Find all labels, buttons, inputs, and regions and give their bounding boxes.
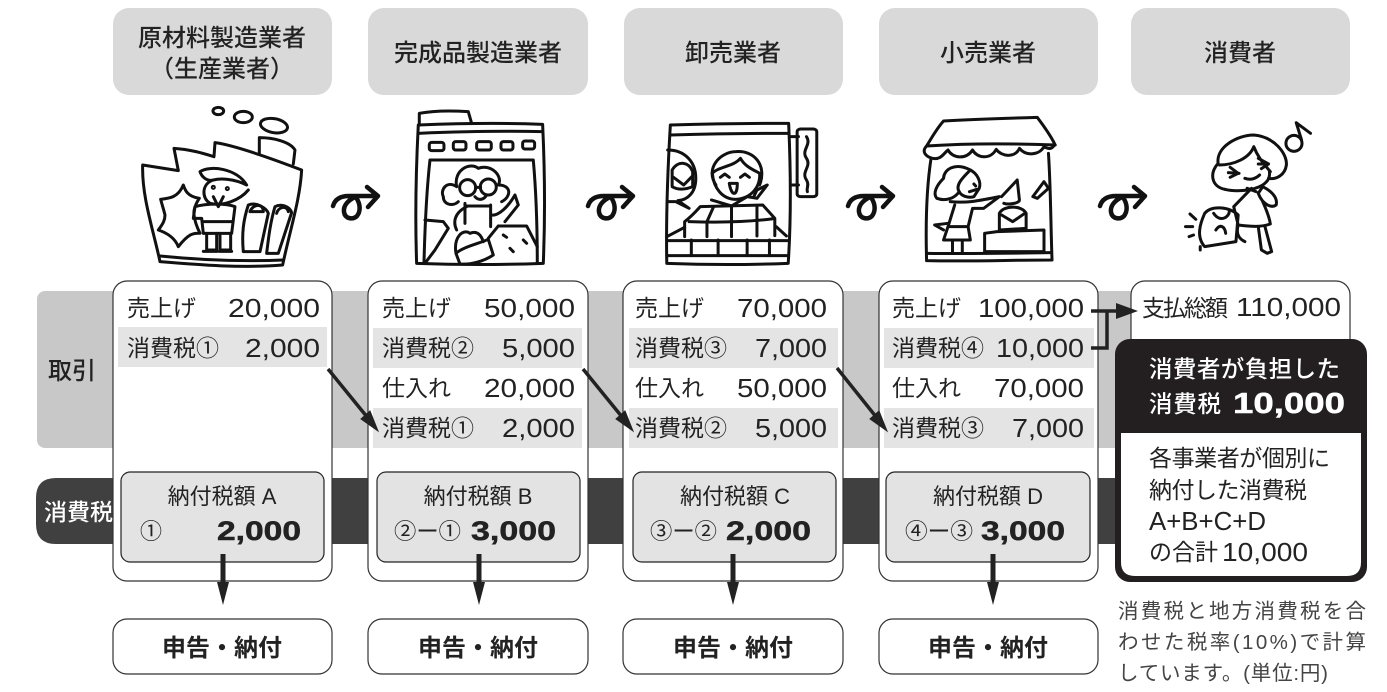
panel: finished goods manufacturer: 消費税① [382, 409, 474, 443]
panel: retailer: 70,000 [994, 373, 1084, 403]
heading: consumer: 消費者 [1204, 40, 1276, 67]
panel: wholesaler: ③ー② [650, 514, 717, 546]
band: transactions background [37, 291, 1137, 448]
panel: finished goods manufacturer: 仕入れ [382, 369, 451, 403]
panel: finished goods manufacturer: ②ー① [394, 514, 461, 546]
panel: raw material manufacturer: 消費税① [127, 329, 219, 363]
panel: raw material manufacturer: 20,000 [228, 293, 320, 323]
panel: consumer tax burden: A+B+C+D [1149, 506, 1266, 536]
panel: raw material manufacturer: 2,000 [217, 516, 301, 546]
footnote: わせた税率(10%)で計算 [1118, 631, 1366, 654]
heading: wholesaler [624, 8, 843, 95]
box: filing and payment C: 申告・納付 [673, 635, 793, 662]
footnote: しています。(単位:円) [1118, 662, 1328, 685]
panel: retailer: 7,000 [1012, 413, 1084, 443]
panel: consumer payment: 支払総額 [1142, 295, 1228, 321]
icon: happy consumer [1186, 123, 1310, 253]
box: filing and payment D: 申告・納付 [928, 635, 1048, 662]
arrow: flow 1 [333, 187, 378, 218]
panel: raw material manufacturer: 納付税額 A [168, 484, 277, 509]
panel: consumer tax burden: 消費者が負担した [1149, 356, 1340, 382]
box: filing and payment B [368, 619, 588, 674]
arrow: filing B [473, 554, 485, 605]
icon: finished goods workshop [416, 111, 544, 265]
heading: finished goods manufacturer: 完成品製造業者 [394, 40, 562, 67]
arrow: tax carried to wholesaler [583, 369, 633, 431]
panel: finished goods manufacturer: 5,000 [502, 333, 575, 363]
box: filing and payment D [879, 619, 1098, 674]
arrow: flow 2 [588, 187, 633, 218]
panel: wholesaler: 売上げ [635, 289, 704, 323]
panel: raw material manufacturer: 2,000 [245, 333, 320, 363]
panel: retailer: 100,000 [978, 293, 1084, 323]
panel: finished goods manufacturer: 消費税② [382, 329, 474, 363]
panel: raw material manufacturer: ① [140, 514, 162, 546]
box: filing and payment C [623, 619, 843, 674]
panel: consumer tax burden: 10,000 [1233, 388, 1345, 420]
panel: consumer payment: 110,000 [1236, 292, 1341, 322]
icon: wholesaler shop [667, 123, 817, 265]
panel: consumer tax burden: 消費税 [1149, 391, 1221, 417]
panel: wholesaler: 納付税額 C [680, 484, 790, 509]
box: filing and payment A [113, 619, 332, 674]
panel: finished goods manufacturer [368, 281, 588, 581]
panel: retailer [879, 281, 1098, 581]
panel: wholesaler: 仕入れ [635, 369, 704, 403]
heading: retailer: 小売業者 [940, 40, 1036, 67]
panel: finished goods manufacturer: 3,000 [471, 516, 556, 546]
arrow: flow 4 [1100, 187, 1145, 218]
label: transactions: 取引 [48, 358, 96, 385]
arrow: tax carried to finished goods manufacturer [328, 369, 378, 431]
arrow: filing A [217, 554, 229, 605]
panel: finished goods manufacturer: 売上げ [382, 289, 451, 323]
panel: raw material manufacturer [113, 281, 332, 581]
panel: retailer: 消費税③ [892, 409, 984, 443]
panel: retailer: 仕入れ [892, 369, 961, 403]
panel: finished goods manufacturer: 納付税額 B [424, 484, 532, 509]
panel: consumer tax burden: の合計 [1149, 539, 1218, 565]
icon: factory [143, 107, 302, 266]
panel: wholesaler: 70,000 [737, 293, 827, 323]
panel: consumer tax burden: 10,000 [1222, 537, 1308, 567]
heading: finished goods manufacturer [368, 8, 588, 95]
panel: retailer: 3,000 [981, 516, 1065, 546]
panel: wholesaler: 2,000 [726, 516, 811, 546]
icon: retail store [924, 117, 1055, 261]
heading: retailer [879, 8, 1098, 95]
panel: consumer tax burden: 各事業者が個別に [1149, 445, 1330, 471]
panel: wholesaler [623, 281, 843, 581]
heading: raw material manufacturer [113, 8, 332, 95]
panel: finished goods manufacturer: 50,000 [484, 293, 575, 323]
panel: retailer: 売上げ [892, 289, 961, 323]
panel: consumer payment [1131, 281, 1350, 371]
arrow: filing C [727, 554, 739, 605]
panel: raw material manufacturer: 売上げ [127, 289, 196, 323]
footnote: 消費税と地方消費税を合 [1118, 600, 1366, 623]
panel: finished goods manufacturer: 2,000 [502, 413, 575, 443]
arrow: flow 3 [848, 187, 893, 218]
panel: retailer: 納付税額 D [933, 484, 1043, 509]
panel: consumer tax burden [1115, 339, 1367, 582]
panel: wholesaler: 7,000 [755, 333, 827, 363]
label: consumption tax: 消費税 [44, 499, 113, 525]
arrow: tax carried to retailer [837, 368, 887, 431]
panel: wholesaler: 50,000 [737, 373, 827, 403]
panel: wholesaler: 消費税③ [635, 329, 727, 363]
band: consumption tax background [36, 478, 1120, 544]
panel: wholesaler: 5,000 [755, 413, 827, 443]
panel: retailer: 10,000 [996, 333, 1084, 363]
panel: consumer tax burden: 納付した消費税 [1149, 477, 1307, 503]
panel: wholesaler: 消費税② [635, 409, 727, 443]
heading: consumer [1131, 8, 1350, 95]
panel: retailer: ④ー③ [905, 514, 973, 546]
footnote [1118, 600, 1366, 685]
heading: raw material manufacturer: 原材料製造業者 [138, 25, 306, 52]
heading: wholesaler: 卸売業者 [685, 40, 781, 67]
panel: retailer: 消費税④ [892, 329, 984, 363]
box: filing and payment A: 申告・納付 [162, 635, 282, 662]
panel: finished goods manufacturer: 20,000 [484, 373, 575, 403]
arrow: payment to consumer [1091, 303, 1138, 348]
heading: raw material manufacturer: （生産業者） [150, 56, 294, 83]
arrow: filing D [987, 554, 999, 605]
box: filing and payment B: 申告・納付 [418, 635, 538, 662]
